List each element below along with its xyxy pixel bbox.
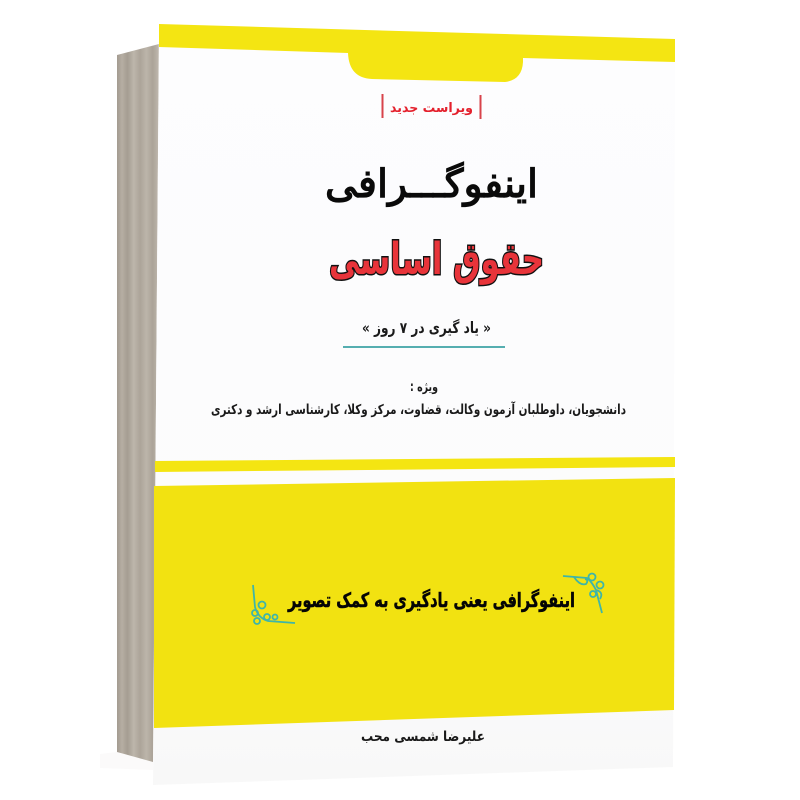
teal divider bbox=[343, 346, 505, 348]
cover background bbox=[153, 24, 675, 785]
subtitle: « یاد گیری در ۷ روز » bbox=[362, 318, 491, 337]
ornament: bottom left bbox=[252, 585, 295, 624]
main title: اینفوگـــرافی bbox=[325, 162, 538, 207]
tagline: اینفوگرافی یعنی یادگیری به کمک تصویر bbox=[287, 588, 575, 612]
floor shadow bbox=[100, 752, 153, 770]
audience label: ویژه : bbox=[410, 380, 438, 395]
top yellow band with tab bbox=[159, 24, 675, 82]
book page edges bbox=[117, 44, 159, 762]
audience list: دانشجویان، داوطلبان آزمون وکالت، قضاوت، مرکز وکلا، کارشناسی ارشد و دکتری bbox=[211, 401, 626, 418]
main yellow block bbox=[154, 478, 675, 728]
edition label: ویراست جدید bbox=[390, 101, 473, 116]
edition label bbox=[382, 94, 482, 119]
subject title: حقوق اساسی bbox=[329, 234, 544, 285]
yellow stripe bbox=[155, 457, 675, 472]
author name: علیرضا شمسی محب bbox=[361, 729, 485, 745]
ornament: top right bbox=[563, 574, 604, 613]
